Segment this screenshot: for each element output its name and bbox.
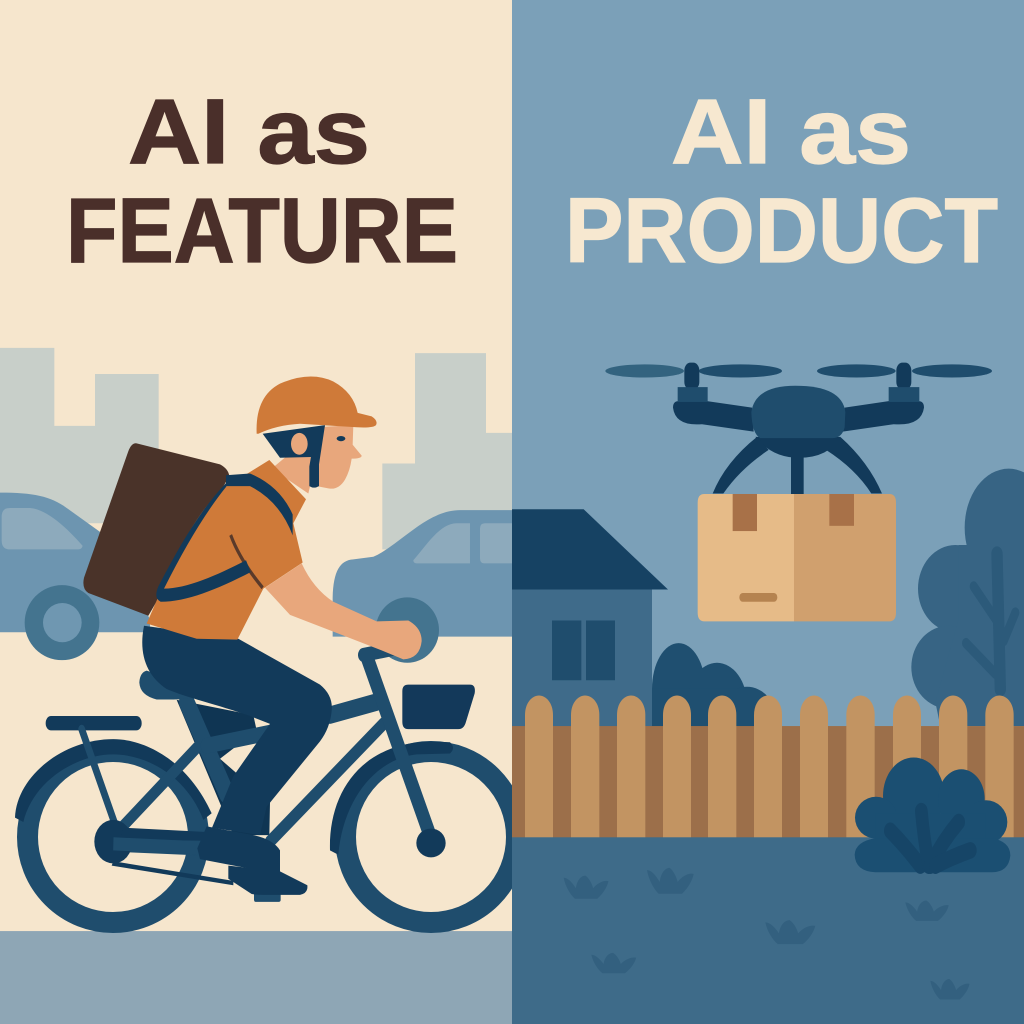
car: right <box>333 510 512 663</box>
illustration: drone scene <box>512 363 1024 1024</box>
panel: AI as product <box>512 0 1024 1024</box>
wheels <box>28 752 516 922</box>
car: left <box>0 493 150 660</box>
rotors <box>605 364 992 378</box>
motors and arms <box>673 363 924 495</box>
heading: AI as Product: AI as <box>671 81 911 183</box>
heading: AI as Feature: AI as <box>128 81 370 183</box>
heading: AI as Feature: FEATURE <box>66 180 458 282</box>
tree <box>911 469 1024 726</box>
house <box>512 509 668 728</box>
sleeve fold <box>231 535 263 588</box>
neck <box>272 453 317 494</box>
arm <box>265 563 422 659</box>
package <box>698 494 896 621</box>
head <box>263 425 362 489</box>
illustration: cyclist scene <box>0 348 512 1024</box>
lawn <box>512 837 1024 1024</box>
straps <box>156 473 293 602</box>
drivetrain <box>94 820 446 885</box>
front bush <box>855 757 1010 872</box>
shirt <box>147 460 306 640</box>
frame <box>82 656 431 848</box>
backpack <box>83 443 229 616</box>
fence <box>512 696 1024 838</box>
grass tufts <box>564 868 970 999</box>
pedal <box>254 891 281 902</box>
heading: AI as Product: PRODUCT <box>565 180 998 282</box>
helmet <box>257 376 377 434</box>
trousers <box>142 626 332 835</box>
city skyline <box>0 348 512 549</box>
drone <box>605 363 992 495</box>
shoes <box>197 826 307 895</box>
road <box>0 931 512 1024</box>
basket <box>402 685 475 729</box>
bicycle <box>15 648 517 922</box>
saddle <box>139 671 194 699</box>
rider <box>83 376 422 895</box>
rear leg <box>177 700 270 835</box>
panel: AI as feature <box>0 0 516 1024</box>
handlebar <box>363 648 400 655</box>
heading: AI as Feature <box>66 81 458 282</box>
back bush <box>652 643 777 757</box>
heading: AI as Product <box>565 81 998 282</box>
fenders and rack <box>15 716 453 855</box>
